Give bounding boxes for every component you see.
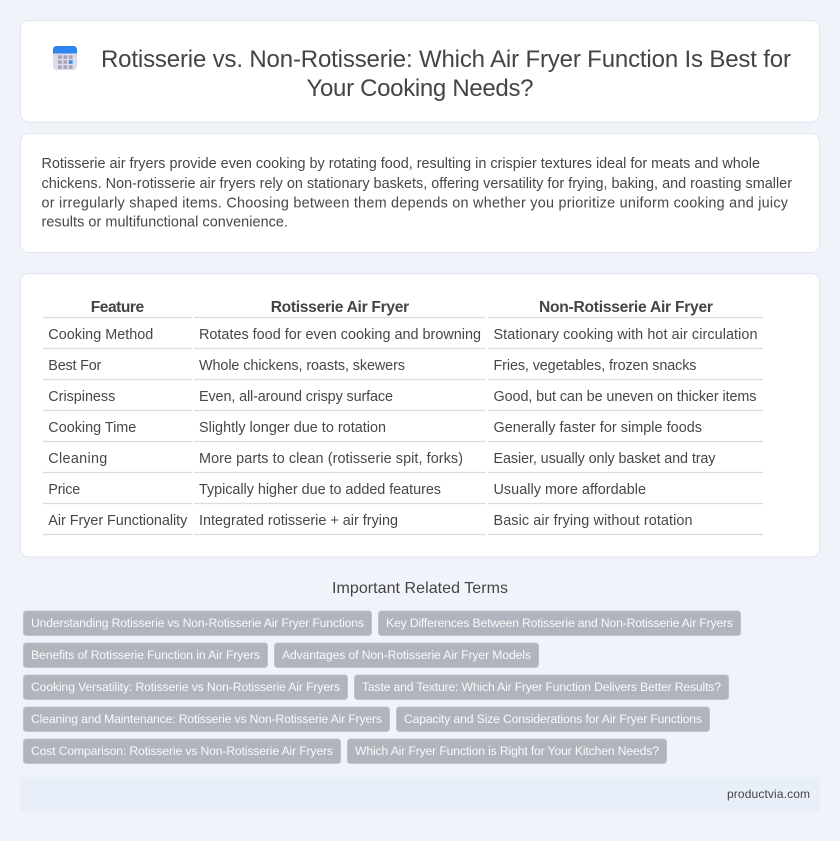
row: cooking time: Slightly longer due to rotation bbox=[199, 420, 386, 436]
row: air fryer functionality: Basic air frying without rotation bbox=[494, 513, 692, 529]
table header: Non-Rotisserie Air Fryer bbox=[539, 299, 713, 316]
table header: Rotisserie Air Fryer bbox=[271, 299, 409, 316]
tag: Taste and Texture: Which Air Fryer Function Delivers Better Results? bbox=[362, 680, 721, 694]
table header bbox=[91, 299, 713, 316]
row: cleaning: Cleaning bbox=[48, 451, 107, 467]
tag bbox=[348, 739, 666, 764]
row: price bbox=[48, 482, 646, 498]
title: Rotisserie vs. Non-Rotisserie: Which Air Fryer Function Is Best for bbox=[101, 46, 791, 73]
tag bbox=[396, 707, 710, 732]
tag: Advantages of Non-Rotisserie Air Fryer Models bbox=[282, 648, 531, 662]
panel: comparison table bbox=[20, 274, 820, 557]
row: price: Typically higher due to added features bbox=[199, 482, 441, 498]
panel: title bbox=[20, 20, 820, 122]
tag: Understanding Rotisserie vs Non-Rotisserie Air Fryer Functions bbox=[31, 616, 364, 630]
row: cooking time bbox=[48, 420, 702, 436]
row: air fryer functionality: Integrated rotisserie + air frying bbox=[199, 513, 398, 529]
title bbox=[101, 46, 791, 102]
row: best for bbox=[48, 358, 697, 374]
tag: Capacity and Size Considerations for Air Fryer Functions bbox=[404, 712, 702, 726]
table header: Feature bbox=[91, 299, 145, 316]
row: cooking method bbox=[48, 327, 758, 343]
text block: description: Rotisserie air fryers provide even cooking by rotating food, resulting in crispier textures ideal for meats and whole bbox=[42, 156, 760, 172]
row: cooking time: Cooking Time bbox=[48, 420, 136, 436]
row: cooking method: Cooking Method bbox=[48, 327, 153, 343]
text block: description: results or multifunctional convenience. bbox=[42, 214, 288, 230]
row: air fryer functionality: Air Fryer Functionality bbox=[48, 513, 188, 529]
tag bbox=[24, 675, 348, 700]
text block: description bbox=[42, 156, 792, 230]
tag: Key Differences Between Rotisserie and Non-Rotisserie Air Fryers bbox=[386, 616, 733, 630]
tag: Which Air Fryer Function is Right for Your Kitchen Needs? bbox=[355, 744, 659, 758]
tag: Cost Comparison: Rotisserie vs Non-Rotisserie Air Fryers bbox=[31, 744, 333, 758]
row: price: Price bbox=[48, 482, 80, 498]
text block: description: chickens. Non-rotisserie air fryers rely on stationary baskets, offering versatility for frying, baking, and roasting smaller bbox=[42, 176, 792, 192]
tag: Cleaning and Maintenance: Rotisserie vs Non-Rotisserie Air Fryers bbox=[31, 712, 382, 726]
tag bbox=[24, 707, 390, 732]
title: Your Cooking Needs? bbox=[306, 75, 534, 102]
tag bbox=[378, 611, 740, 636]
tag bbox=[24, 643, 268, 668]
tag bbox=[24, 611, 372, 636]
row: crispiness: Crispiness bbox=[48, 389, 115, 405]
tag: Benefits of Rotisserie Function in Air Fryers bbox=[31, 648, 260, 662]
tag bbox=[24, 739, 340, 764]
row: cleaning: Easier, usually only basket and tray bbox=[494, 451, 716, 467]
row: cleaning: More parts to clean (rotisserie spit, forks) bbox=[199, 451, 463, 467]
icon: calendar bbox=[53, 46, 77, 70]
row: cooking method: Stationary cooking with hot air circulation bbox=[494, 327, 758, 343]
row: best for: Best For bbox=[48, 358, 102, 374]
text block: description: or irregularly shaped items. Choosing between them depends on whether you prioritize uniform cooking and juicy bbox=[42, 196, 789, 212]
row: crispiness: Good, but can be uneven on thicker items bbox=[494, 389, 756, 405]
panel: description bbox=[20, 134, 820, 252]
row: best for: Whole chickens, roasts, skewers bbox=[199, 358, 405, 374]
row: cooking time: Generally faster for simple foods bbox=[494, 420, 702, 436]
row: cooking method: Rotates food for even cooking and browning bbox=[199, 327, 481, 343]
tags: related terms bbox=[24, 611, 740, 764]
footer: productvia.com bbox=[727, 787, 810, 801]
row: price: Usually more affordable bbox=[494, 482, 646, 498]
row: best for: Fries, vegetables, frozen snacks bbox=[494, 358, 696, 374]
heading: related terms: Important Related Terms bbox=[332, 580, 508, 597]
tag bbox=[354, 675, 728, 700]
tag bbox=[274, 643, 538, 668]
row: crispiness: Even, all-around crispy surface bbox=[199, 389, 393, 405]
row: crispiness bbox=[48, 389, 757, 405]
tag: Cooking Versatility: Rotisserie vs Non-Rotisserie Air Fryers bbox=[31, 680, 340, 694]
footer bbox=[20, 777, 820, 811]
row: air fryer functionality bbox=[48, 513, 693, 529]
row: cleaning bbox=[48, 451, 716, 467]
